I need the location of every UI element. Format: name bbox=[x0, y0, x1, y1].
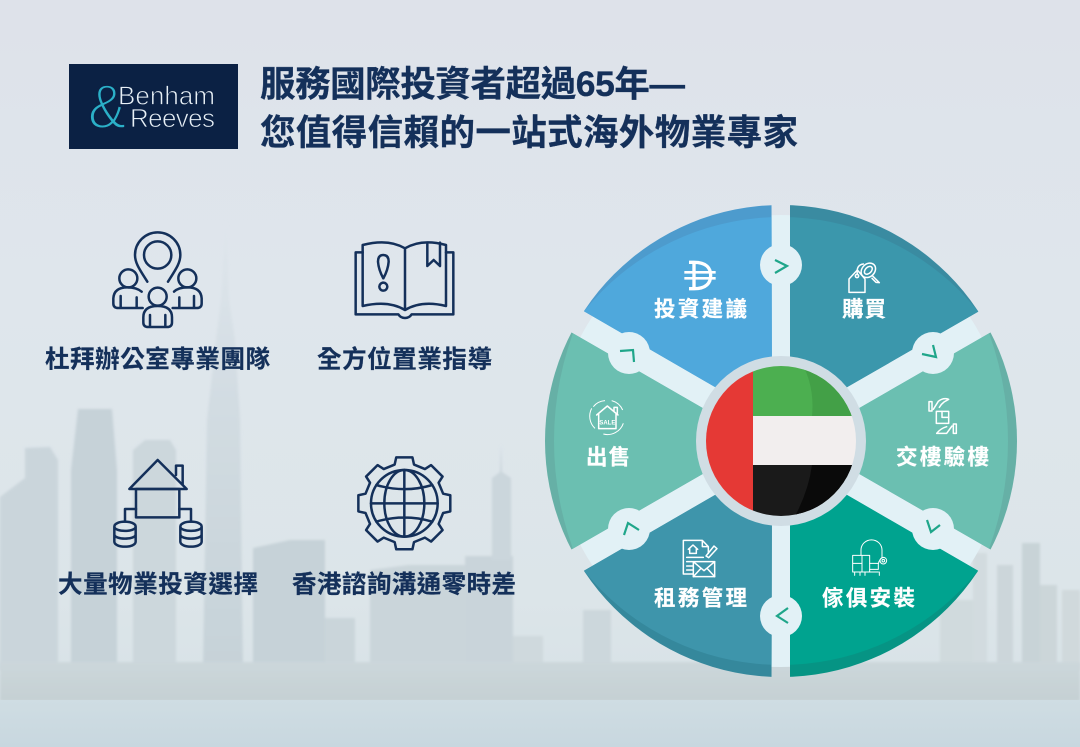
icon: house for sale bbox=[590, 401, 623, 435]
label: all-round property guidance: 全方位置業指導 bbox=[317, 344, 492, 374]
label: investment advice: 投資建議 bbox=[654, 298, 747, 322]
icon: armchair and cabinet bbox=[853, 540, 887, 575]
icon: house for sale: SALE bbox=[599, 420, 615, 426]
segment: sale bbox=[545, 332, 703, 550]
icon: dirham symbol bbox=[684, 262, 716, 289]
logo: Benham & Reeves: & bbox=[88, 73, 126, 142]
arrow chevrons bbox=[620, 260, 940, 623]
icon: globe in gear bbox=[358, 457, 450, 549]
label: furniture installation: 傢俱安裝 bbox=[822, 586, 915, 610]
icon: rental document and envelope bbox=[683, 540, 717, 577]
centre: UAE flag bbox=[696, 356, 866, 526]
label: Hong Kong consultation, no time difference: 香港諮詢溝通零時差 bbox=[292, 570, 516, 598]
label: purchase: 購買 bbox=[842, 298, 886, 322]
title bbox=[260, 64, 798, 152]
label: handover inspection: 交樓驗樓 bbox=[896, 444, 989, 470]
wheel spokes bbox=[555, 215, 1007, 667]
segment: furniture installation bbox=[790, 494, 978, 677]
arrow nodes bbox=[608, 244, 954, 637]
logo: Benham & Reeves: Benham bbox=[118, 80, 215, 110]
logo: Benham & Reeves: Reeves bbox=[130, 103, 215, 133]
segment: investment advice bbox=[584, 205, 772, 388]
title: 您值得信賴的一站式海外物業專家 bbox=[260, 112, 798, 152]
label: rental management: 租務管理 bbox=[654, 586, 747, 610]
title: 服務國際投資者超過65年— bbox=[260, 64, 686, 104]
icon: house with data stacks bbox=[114, 460, 202, 547]
icon: hands passing a box bbox=[929, 399, 956, 433]
label: sale: 出售 bbox=[586, 446, 630, 470]
icon: key and tag bbox=[849, 260, 879, 292]
segment: handover inspection bbox=[859, 332, 1017, 550]
label: wide property investment choices: 大量物業投資選擇 bbox=[58, 570, 258, 598]
segment: purchase bbox=[790, 205, 978, 388]
icon: open book with exclamation mark bbox=[356, 242, 453, 318]
label: Dubai office team: 杜拜辦公室專業團隊 bbox=[45, 344, 270, 374]
icon: local team with map pin bbox=[113, 232, 202, 327]
segment: rental management bbox=[584, 494, 772, 677]
wheel: service cycle bbox=[545, 205, 1017, 677]
logo: Benham & Reeves bbox=[69, 64, 238, 149]
